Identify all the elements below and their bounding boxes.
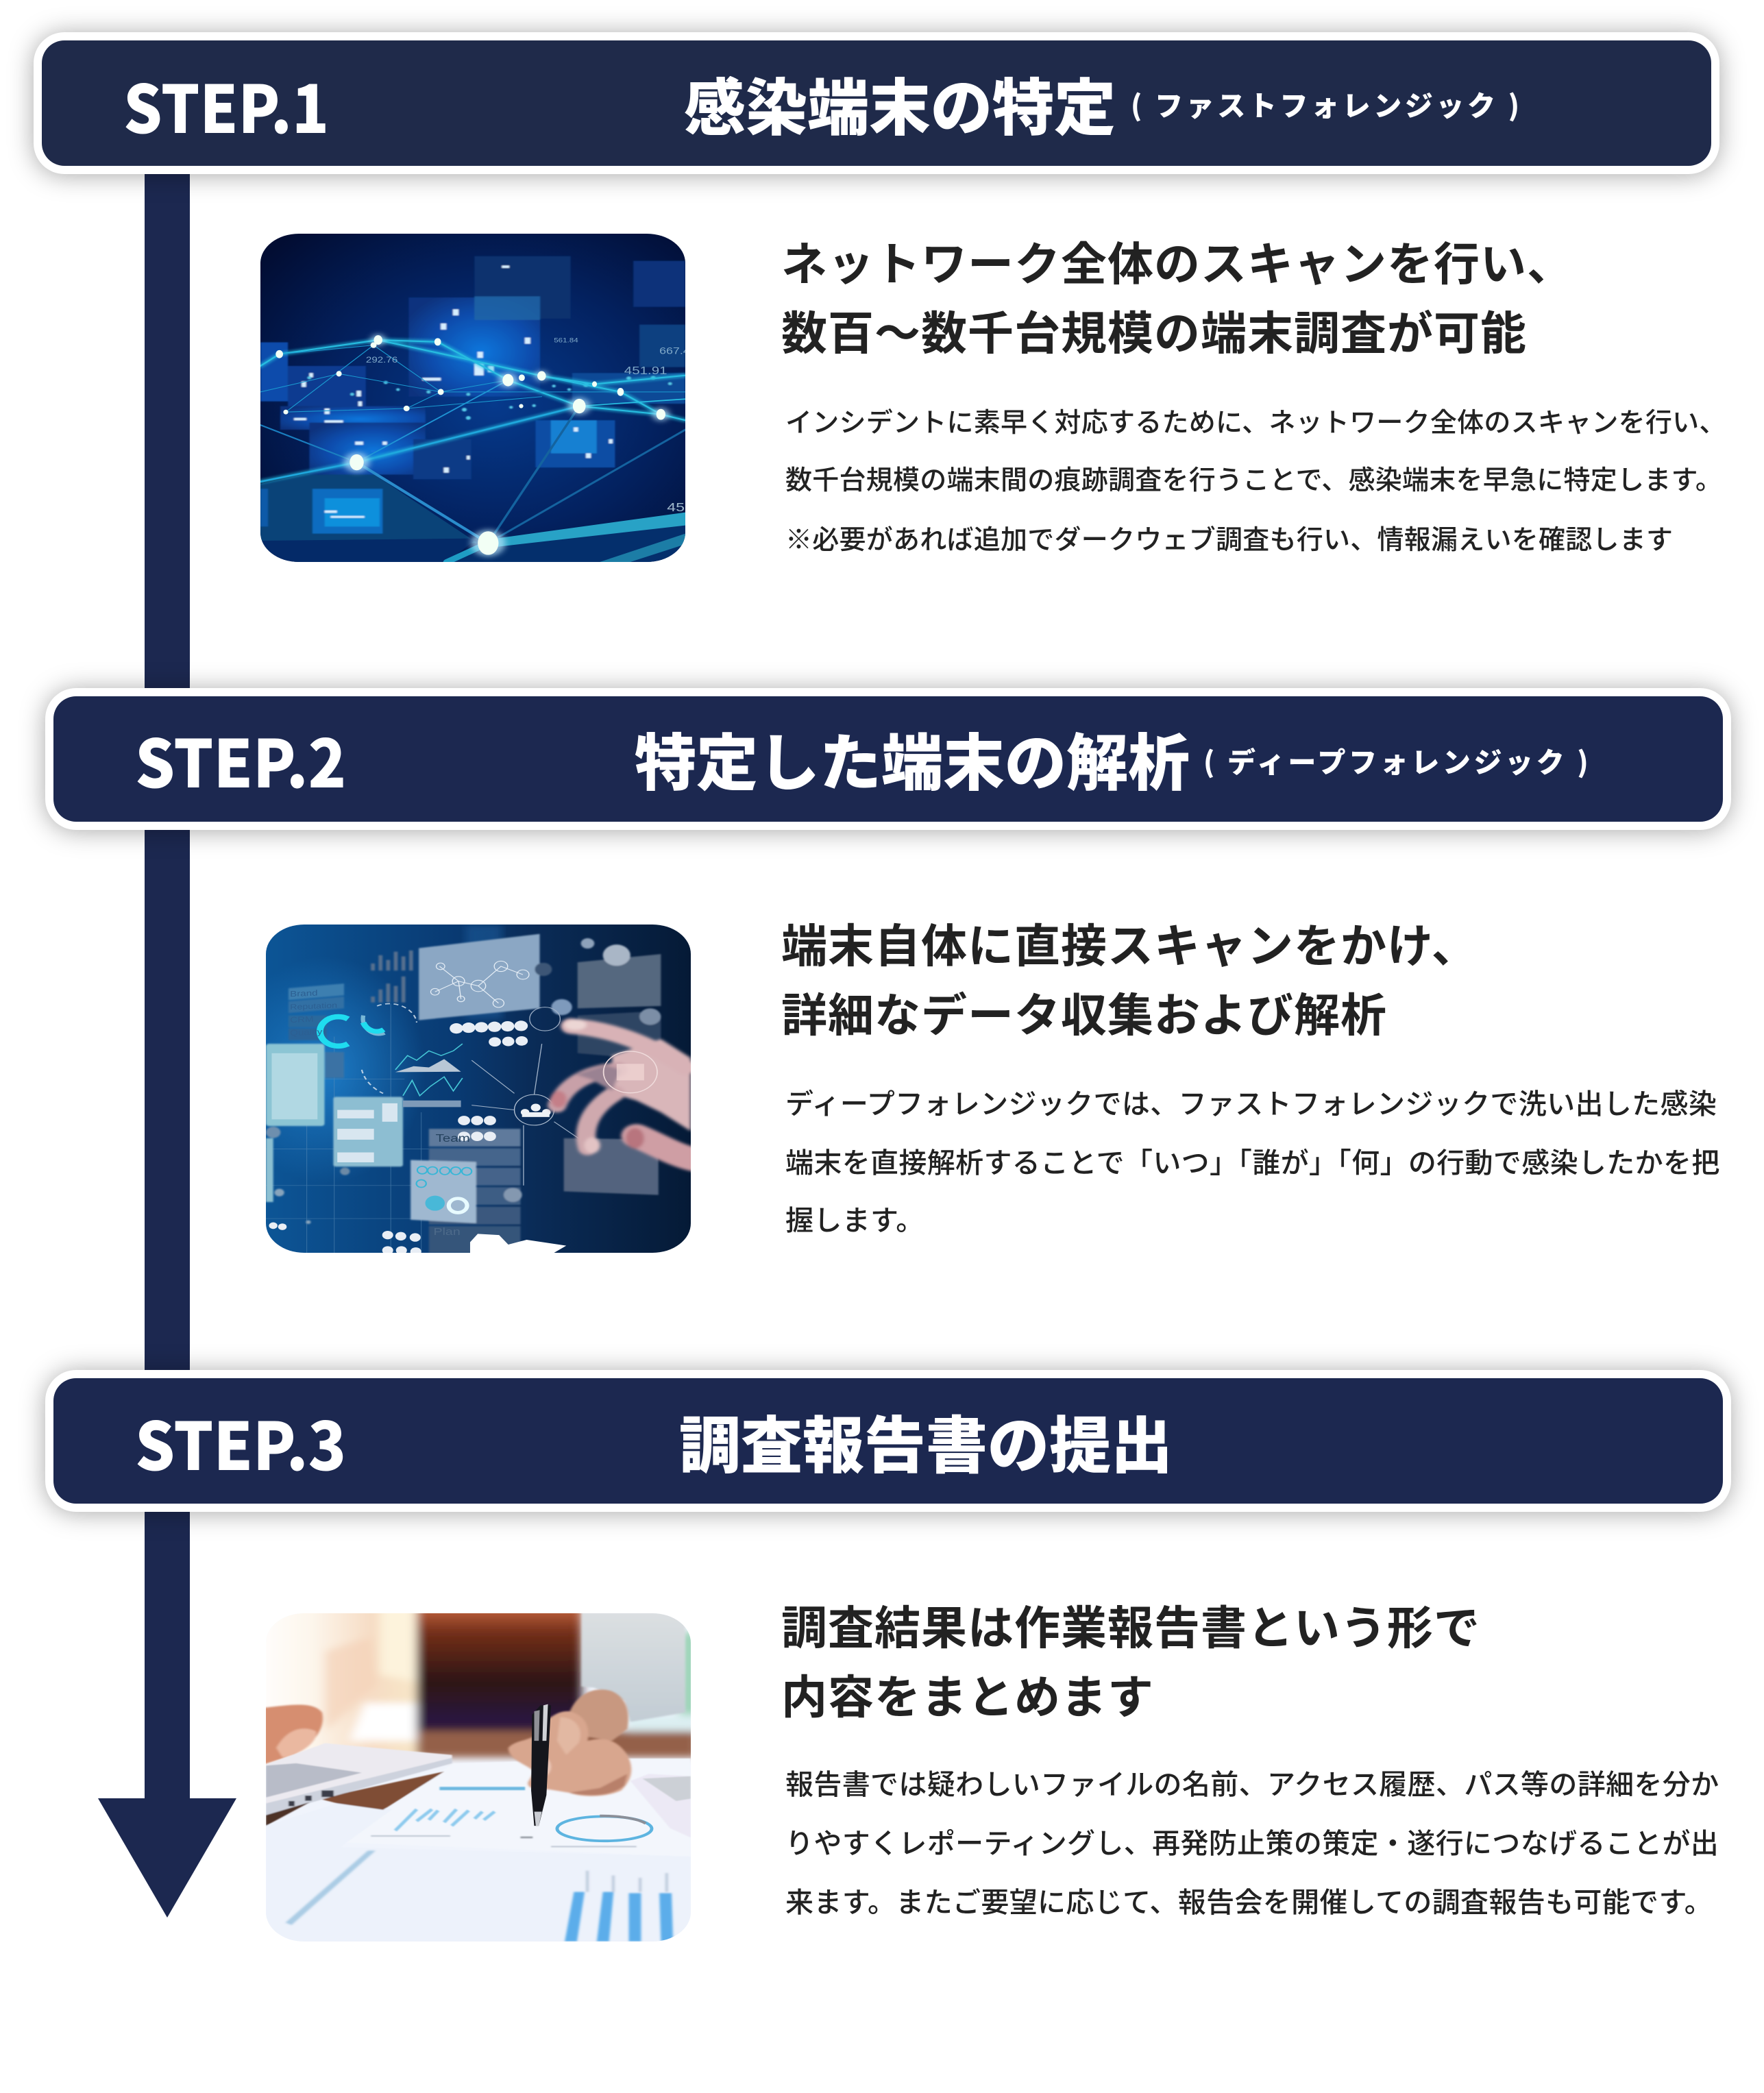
image: digital dashboard touch: Quality (290, 1027, 323, 1038)
heading: step 3 headline line 1: 調査結果は作業報告書という形で (781, 1591, 1480, 1658)
step 2 label: STEP.2 (135, 711, 346, 807)
step 3 title: 調査報告書の提出 (679, 1396, 1173, 1485)
image: network scan: 292.76 (366, 355, 397, 364)
image: digital dashboard touch: CRM (290, 1014, 314, 1025)
image: digital dashboard touch: Brand (290, 988, 318, 999)
panel: step 2 header (45, 688, 1731, 830)
text: step 3 body line 3: 来ます。またご要望に応じて、報告会を開催しての調査報告も可能です。 (785, 1879, 1713, 1920)
image: digital dashboard touch: Plan (434, 1225, 461, 1238)
image: digital dashboard touch: Reputation (290, 1001, 337, 1012)
heading: step 3 headline line 2: 内容をまとめます (781, 1661, 1154, 1727)
step 1 subtitle: ( ファストフォレンジック ) (1131, 83, 1523, 124)
panel: step 1 header (34, 32, 1719, 174)
text: step 1 body line 1: インシデントに素早く対応するために、ネットワーク全体のスキャンを行い、 (785, 402, 1726, 440)
image: digital dashboard touch (266, 925, 691, 1253)
text: step 3 body line 1: 報告書では疑わしいファイルの名前、アクセス履歴、パス等の詳細を分か (785, 1761, 1719, 1802)
image: network scan (260, 234, 685, 562)
panel: step 3 header (45, 1370, 1731, 1512)
heading: step 1 headline line 1: ネットワーク全体のスキャンを行い、 (781, 228, 1573, 294)
step 1 title: 感染端末の特定 (684, 58, 1116, 147)
image: network scan: 561.84 (554, 338, 578, 344)
step 3 label: STEP.3 (135, 1394, 346, 1489)
text: step 2 body line 1: ディープフォレンジックでは、ファストフォレンジックで洗い出した感染 (785, 1081, 1717, 1122)
step 2 title: 特定した端末の解析 (635, 713, 1190, 803)
image: report review (266, 1613, 691, 1942)
heading: step 2 headline line 2: 詳細なデータ収集および解析 (781, 979, 1387, 1045)
image: digital dashboard touch: Team (436, 1131, 470, 1144)
step 1 label: STEP.1 (123, 57, 329, 152)
image: network scan: 451.91 (624, 364, 667, 376)
heading: step 1 headline line 2: 数百～数千台規模の端末調査が可能 (781, 297, 1527, 363)
text: step 1 body line 3: ※必要があれば追加でダークウェブ調査も行い、情報漏えいを確認します (785, 519, 1673, 557)
text: step 2 body line 3: 握します。 (785, 1197, 924, 1238)
text: step 3 body line 2: りやすくレポーティングし、再発防止策の策定・遂行につなげることが出 (785, 1820, 1719, 1861)
step 2 subtitle: ( ディープフォレンジック ) (1203, 739, 1591, 781)
text: step 2 body line 2: 端末を直接解析することで「いつ」「誰が」「何」の行動で感染したかを把 (785, 1140, 1720, 1181)
heading: step 2 headline line 1: 端末自体に直接スキャンをかけ、 (781, 909, 1478, 976)
text: step 1 body line 2: 数千台規模の端末間の痕跡調査を行うことで、感染端末を早急に特定します。 (785, 459, 1722, 498)
